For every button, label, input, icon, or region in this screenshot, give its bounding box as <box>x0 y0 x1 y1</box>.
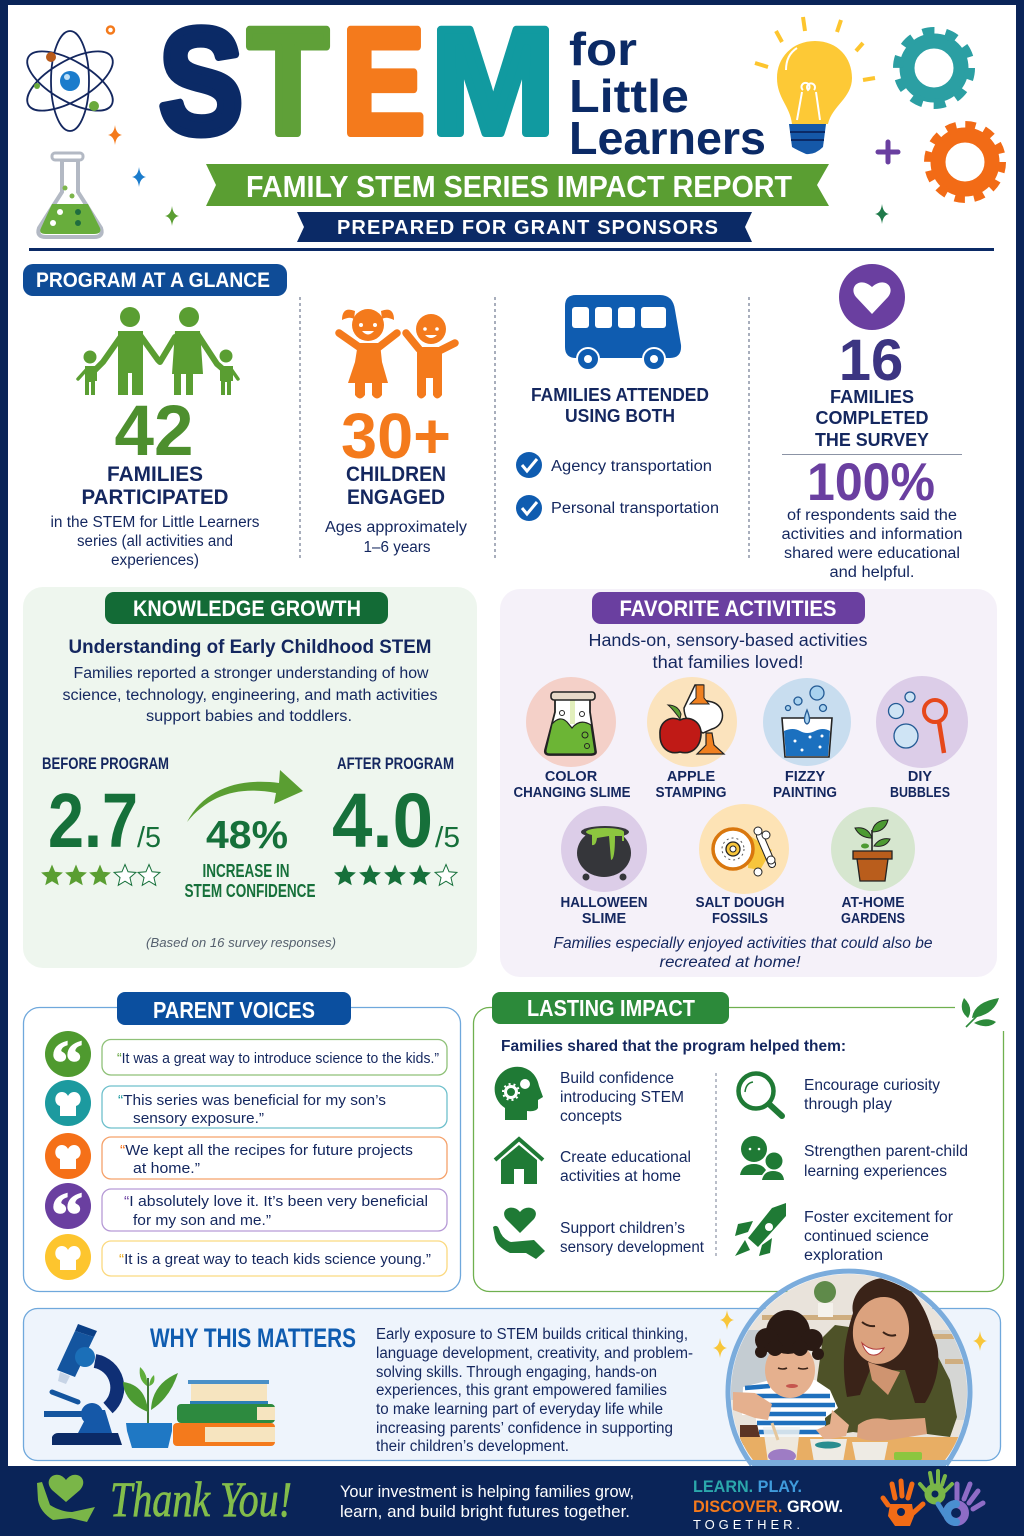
panel: lasting impact: Families shared that the program helped them: <box>501 1038 846 1055</box>
activity: apple stamping: APPLE <box>667 769 715 785</box>
stat: children engaged <box>325 309 467 556</box>
heading: program at a glance: PROGRAM AT A GLANCE <box>36 269 270 292</box>
heading: lasting impact: LASTING IMPACT <box>527 995 695 1021</box>
stat: survey: COMPLETED <box>816 407 928 428</box>
note: enjoyed at home: Families especially enjoyed activities that could also be <box>554 935 933 952</box>
icon: family <box>78 307 238 395</box>
impact: sensory development <box>493 1208 705 1259</box>
banner: report title: FAMILY STEM SERIES IMPACT REPORT <box>246 169 792 204</box>
heading: parent voices: PARENT VOICES <box>153 997 315 1023</box>
stat: survey: 16 <box>839 328 903 393</box>
impact: encourage curiosity: through play <box>804 1096 892 1113</box>
text block: why this matters: solving skills. Through engaging, hands-on <box>376 1364 657 1381</box>
activity: color changing slime <box>514 677 631 801</box>
title: STEM: M <box>431 0 555 165</box>
impact: encourage curiosity <box>738 1074 940 1116</box>
quote: sensory exposure <box>45 1080 447 1128</box>
stat: transportation: USING BOTH <box>565 405 675 426</box>
woman: face and neck <box>868 1362 900 1395</box>
quote: introduce science <box>45 1027 447 1098</box>
impact: build confidence: concepts <box>560 1108 622 1125</box>
quote: teach kids young: “It is a great way to teach kids science young.” <box>119 1252 431 1268</box>
activity: fizzy painting: PAINTING <box>773 785 837 801</box>
impact: encourage curiosity: Encourage curiosity <box>804 1077 940 1094</box>
activity: at-home gardens: AT-HOME <box>842 895 905 911</box>
text block: why this matters: language development, creativity, and problem- <box>376 1345 693 1362</box>
impact: educational activities: activities at home <box>560 1168 681 1185</box>
panel: parent voices <box>24 992 460 1292</box>
activity: DIY bubbles: BUBBLES <box>890 785 950 801</box>
icon: heart <box>839 264 905 330</box>
stat: children engaged: 1–6 years <box>364 539 431 556</box>
stat: 48 percent increase <box>184 814 316 901</box>
panel: why this matters <box>24 1270 1000 1466</box>
activity: apple stamping: STAMPING <box>656 785 726 801</box>
title: STEM: E <box>342 0 425 165</box>
quote: introduce science: “ <box>51 1027 83 1098</box>
activity: fizzy painting <box>763 678 851 801</box>
stat: survey: shared were educational <box>784 545 960 562</box>
impact: continued exploration: continued science <box>804 1228 929 1245</box>
quote: introduce science: “It was a great way to introduce science to the kids.” <box>117 1051 439 1067</box>
panel: knowledge growth <box>23 587 477 968</box>
stat: before program: /5 <box>137 822 161 854</box>
stat: families participated <box>50 307 260 569</box>
stat: 48 percent increase: INCREASE IN <box>202 861 290 881</box>
impact: build confidence <box>495 1067 684 1125</box>
activity: apple stamping <box>647 677 737 801</box>
panel: favorite activities <box>500 589 997 977</box>
activity: at-home gardens <box>831 807 915 927</box>
quote: teach kids young <box>45 1234 447 1280</box>
stat: survey: THE SURVEY <box>815 429 930 450</box>
activity: halloween slime <box>560 806 648 927</box>
stat: after program: 4.0 <box>332 778 433 864</box>
stat: children engaged: CHILDREN <box>346 463 446 486</box>
quote: very beneficial: for my son and me.” <box>133 1213 271 1229</box>
icon: light bulb <box>755 17 875 154</box>
quote: recipes <box>45 1133 447 1179</box>
panel: knowledge growth: (Based on 16 survey responses) <box>146 935 336 950</box>
activity: salt dough fossils <box>696 804 789 927</box>
banner: prepared for <box>297 212 752 242</box>
quote: recipes: at home.” <box>133 1161 200 1177</box>
icon: flask <box>38 153 102 237</box>
icon: bus <box>565 295 681 370</box>
icon: microscope <box>44 1324 122 1445</box>
text block: why this matters: experiences, this grant empowered families <box>376 1382 667 1399</box>
boy: chair and shirt <box>742 1380 838 1437</box>
impact: sensory development: sensory development <box>560 1239 705 1256</box>
note: enjoyed at home <box>554 935 933 971</box>
stat: families participated: PARTICIPATED <box>82 486 228 509</box>
stat: 48 percent increase: STEM CONFIDENCE <box>184 881 316 901</box>
impact: parent-child learning: learning experiences <box>804 1163 947 1180</box>
check: personal transportation <box>516 495 719 521</box>
impact: build confidence: introducing STEM <box>560 1089 684 1106</box>
icon: teal gear <box>898 32 970 104</box>
quote: sensory exposure: sensory exposure.” <box>133 1111 264 1127</box>
panel: why this matters: WHY THIS MATTERS <box>150 1323 356 1353</box>
activity: color changing slime: CHANGING SLIME <box>514 785 631 801</box>
impact: educational activities <box>495 1139 691 1185</box>
stars: 2.7 of 5 <box>41 864 160 885</box>
icon: hand and heart <box>37 1475 95 1522</box>
icon: painted hands <box>883 1471 983 1526</box>
stat: survey <box>782 264 962 581</box>
stat: before program <box>41 754 169 885</box>
title: STEM <box>159 0 555 165</box>
title: STEM: T <box>248 0 328 165</box>
impact: continued exploration: exploration <box>804 1247 883 1264</box>
stat: survey: activities and information <box>782 526 962 543</box>
woman: hair <box>844 1278 938 1403</box>
panel: knowledge growth: Understanding of Early Childhood STEM <box>68 636 432 658</box>
stars: 4 of 5 <box>334 864 457 885</box>
impact: continued exploration: Foster excitement for <box>804 1209 953 1226</box>
quote: sensory exposure: “This series was beneficial for my son’s <box>118 1093 386 1109</box>
stat: families participated: series (all activities and <box>77 533 233 550</box>
impact: parent-child learning <box>740 1136 968 1180</box>
slogan: DISCOVER. GROW. <box>693 1497 843 1516</box>
boy: arms <box>733 1392 772 1420</box>
activity: color changing slime: COLOR <box>545 769 598 785</box>
activity: DIY bubbles: DIY <box>908 769 932 785</box>
photo: parent and child doing activity <box>720 1270 980 1466</box>
icon: plant <box>123 1367 178 1448</box>
text block: why this matters: Early exposure to STEM builds critical thinking, <box>376 1326 688 1343</box>
subtitle: for Little Learners <box>569 23 766 164</box>
activity: halloween slime: SLIME <box>582 911 626 927</box>
panel: program at a glance <box>23 264 962 581</box>
text block: why this matters: increasing parents’ confidence in supporting <box>376 1420 673 1437</box>
stat: survey: and helpful. <box>830 564 914 581</box>
panel: knowledge growth: support babies and toddlers. <box>146 708 352 725</box>
footer: Your investment is helping families grow, <box>340 1483 634 1501</box>
slogan: TOGETHER. <box>693 1517 800 1532</box>
heading: favorite activities <box>592 592 865 624</box>
panel: lasting impact <box>474 992 1007 1292</box>
heading: lasting impact <box>492 992 729 1024</box>
heading: parent voices <box>117 992 351 1025</box>
heading: favorite activities: FAVORITE ACTIVITIES <box>620 596 836 621</box>
quote: recipes: “We kept all the recipes for future projects <box>120 1143 413 1159</box>
impact: educational activities: Create educational <box>560 1149 691 1166</box>
activity: at-home gardens: GARDENS <box>841 911 905 927</box>
stat: children engaged: ENGAGED <box>347 486 445 509</box>
stat: before program: BEFORE PROGRAM <box>42 754 169 773</box>
heading: knowledge growth <box>105 592 388 624</box>
boy: head and curly hair <box>765 1350 815 1398</box>
stat: before program: 2.7 <box>48 778 138 864</box>
stat: children engaged: 30+ <box>341 400 451 472</box>
icon: leaves <box>955 995 1007 1031</box>
stat: families participated: experiences) <box>111 552 199 569</box>
quote: very beneficial: “I absolutely love it. It’s been very beneficial <box>124 1194 428 1210</box>
note: enjoyed at home: recreated at home! <box>660 954 801 971</box>
impact: continued exploration <box>735 1203 953 1264</box>
check: agency transportation <box>516 452 712 478</box>
stat: survey: 100% <box>807 453 935 512</box>
check: personal transportation: Personal transportation <box>551 500 719 517</box>
stat: transportation: FAMILIES ATTENDED <box>531 384 709 405</box>
panel: favorite activities: that families loved! <box>652 652 804 672</box>
activity: fizzy painting: FIZZY <box>785 769 825 785</box>
title: STEM: S <box>159 0 243 165</box>
stat: families participated: FAMILIES <box>107 463 203 486</box>
stat: families participated: 42 <box>115 392 193 471</box>
heading: knowledge growth: KNOWLEDGE GROWTH <box>133 596 361 621</box>
text block: why this matters: to make learning part of everyday life while <box>376 1401 663 1418</box>
stat: survey: of respondents said the <box>787 507 957 524</box>
impact: build confidence: Build confidence <box>560 1070 674 1087</box>
craft cups <box>763 1427 800 1462</box>
stat: 48 percent increase: 48% <box>206 814 288 857</box>
check: agency transportation: Agency transportation <box>551 458 712 475</box>
icon: atom <box>18 31 122 131</box>
stat: after program: AFTER PROGRAM <box>337 754 454 773</box>
subtitle: for Little Learners: for <box>569 23 637 75</box>
panel: knowledge growth: science, technology, engineering, and math activities <box>62 687 438 704</box>
panel: knowledge growth: Families reported a stronger understanding of how <box>74 665 429 682</box>
activity: halloween slime: HALLOWEEN <box>560 895 648 911</box>
slogan: LEARN. PLAY. <box>693 1477 802 1496</box>
header <box>18 0 1001 251</box>
text block: why this matters: their children’s development. <box>376 1438 569 1455</box>
icon: children <box>339 309 455 398</box>
stat: children engaged: Ages approximately <box>325 519 467 536</box>
arrow: increase <box>187 770 303 822</box>
text block: why this matters <box>376 1326 693 1455</box>
stat: after program: /5 <box>435 822 460 854</box>
subtitle: for Little Learners: Little <box>569 70 689 122</box>
stat: families participated: in the STEM for Little Learners <box>50 514 260 531</box>
footer: learn, and build bright futures together. <box>340 1503 630 1521</box>
activity: salt dough fossils: FOSSILS <box>712 911 768 927</box>
quote: very beneficial <box>45 1179 447 1250</box>
footer <box>0 1466 1024 1536</box>
quote: very beneficial: “ <box>51 1179 83 1250</box>
impact: parent-child learning: Strengthen parent-child <box>804 1143 968 1160</box>
icon: books <box>173 1380 275 1446</box>
slogan <box>693 1477 843 1532</box>
stat: survey: FAMILIES <box>830 386 914 407</box>
activity: DIY bubbles <box>876 676 968 801</box>
decorative sparkles <box>107 26 898 226</box>
icon: orange gear <box>929 126 1001 198</box>
panel: favorite activities: Hands-on, sensory-based activities <box>588 630 868 650</box>
heading: program at a glance <box>23 264 287 296</box>
subtitle: for Little Learners: Learners <box>569 112 766 164</box>
sparkles <box>713 1310 987 1358</box>
stat: after program <box>332 754 460 885</box>
banner: prepared for: PREPARED FOR GRANT SPONSORS <box>337 217 718 239</box>
impact: sensory development: Support children’s <box>560 1220 685 1237</box>
woman: shirt <box>817 1325 957 1437</box>
footer: Thank You! <box>110 1471 292 1527</box>
stat: transportation <box>516 295 719 521</box>
woman: arm and hand <box>857 1418 927 1441</box>
activity: salt dough fossils: SALT DOUGH <box>696 895 784 911</box>
